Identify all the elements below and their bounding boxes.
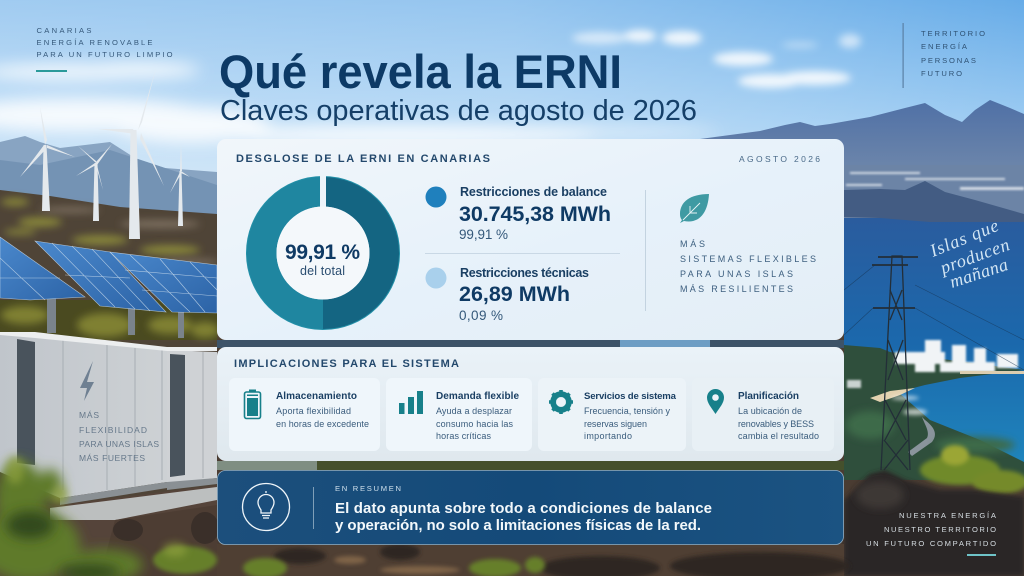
panel: summary	[218, 470, 844, 544]
bottom-right tagline: NUESTRA ENERGÍA	[899, 511, 997, 520]
card: system services: Frecuencia, tensión y	[584, 406, 670, 416]
background: foreground shrubs	[0, 456, 545, 576]
card: system services: importando	[584, 431, 632, 441]
stat: technical	[426, 266, 589, 323]
handwritten note	[926, 215, 1012, 292]
card: storage: Almacenamiento	[276, 391, 357, 402]
stat: technical: 0,09 %	[459, 308, 503, 323]
donut chart	[247, 172, 399, 329]
battery containers	[0, 332, 167, 498]
top-right tagline: PERSONAS	[921, 56, 976, 65]
top-right tagline: FUTURO	[921, 69, 962, 78]
top-right tagline: ENERGÍA	[921, 42, 968, 51]
battery label: FLEXIBILIDAD	[79, 425, 147, 435]
card: system services: reservas siguen	[584, 419, 647, 429]
card: system services: Servicios de sistema	[584, 391, 677, 402]
battery label: MÁS FUERTES	[79, 453, 145, 463]
stat: technical: 26,89 MWh	[459, 282, 570, 306]
stat: balance: 99,91 %	[459, 227, 508, 242]
card: planning	[692, 378, 834, 451]
top-left tagline: CANARIAS	[36, 26, 92, 35]
resilience message: PARA UNAS ISLAS	[680, 269, 793, 279]
panel heading: IMPLICACIONES PARA EL SISTEMA	[234, 358, 459, 370]
card: flexible demand: horas críticas	[436, 431, 492, 441]
handwritten note: mañana	[947, 254, 1010, 292]
card: planning: Planificación	[738, 391, 799, 402]
battery label: PARA UNAS ISLAS	[79, 439, 159, 449]
card: flexible demand	[386, 378, 532, 451]
panel: system implications	[217, 347, 844, 461]
background: ground behind panels	[217, 340, 850, 576]
date label: AGOSTO 2026	[739, 154, 820, 164]
top-right tagline	[902, 23, 985, 88]
panel: ERNI breakdown	[217, 139, 844, 340]
resilience message: MÁS	[680, 239, 705, 249]
card: planning: renovables y BESS	[738, 419, 814, 429]
panel heading: DESGLOSE DE LA ERNI EN CANARIAS	[236, 153, 490, 165]
card: planning: cambia el resultado	[738, 431, 819, 441]
card: storage: Aporta flexibilidad	[276, 406, 351, 416]
background: left wind and solar scene	[0, 68, 220, 576]
resilience message: MÁS RESILIENTES	[680, 284, 793, 294]
stat: balance	[426, 185, 611, 242]
stat: technical: Restricciones técnicas	[460, 266, 589, 280]
card: flexible demand: Demanda flexible	[436, 391, 519, 402]
top-left tagline: ENERGÍA RENOVABLE	[36, 38, 152, 47]
battery label: MÁS	[79, 410, 99, 420]
stat: balance: 30.745,38 MWh	[459, 202, 611, 226]
top-right tagline: TERRITORIO	[921, 29, 985, 38]
subtitle: Claves operativas de agosto de 2026	[220, 95, 697, 127]
background: right island scene	[700, 100, 1024, 576]
handwritten note: producen	[936, 234, 1012, 278]
wind turbines	[20, 68, 190, 239]
card: flexible demand: consumo hacia las	[436, 419, 514, 429]
icon: lightbulb	[242, 484, 290, 530]
card: storage	[229, 378, 380, 451]
battery label	[79, 410, 159, 463]
summary label: EN RESUMEN	[335, 484, 401, 493]
bottom-right tagline: NUESTRO TERRITORIO	[884, 525, 996, 534]
card: storage: en horas de excedente	[276, 419, 369, 429]
bottom-right tagline: UN FUTURO COMPARTIDO	[866, 539, 996, 548]
top-left tagline	[36, 26, 173, 72]
resilience message: SISTEMAS FLEXIBLES	[680, 254, 816, 264]
stat: balance: Restricciones de balance	[460, 185, 607, 199]
bottom-right tagline	[866, 511, 997, 556]
solar panels	[47, 295, 184, 338]
background: sky	[0, 0, 1024, 240]
handwritten note: Islas que	[926, 215, 1001, 261]
top-left tagline: PARA UN FUTURO LIMPIO	[36, 50, 173, 59]
battery lightning icon	[80, 361, 94, 401]
card: system services	[538, 378, 686, 451]
card: planning: La ubicación de	[738, 406, 802, 416]
summary text	[335, 500, 712, 534]
title: Qué revela la ERNI	[219, 45, 622, 98]
resilience message	[680, 239, 816, 294]
summary text: y operación, no solo a limitaciones físicas de la red.	[335, 517, 701, 534]
icon: leaf	[680, 194, 709, 223]
donut chart: 99,91 %	[285, 241, 360, 264]
summary text: El dato apunta sobre todo a condiciones de balance	[335, 500, 712, 517]
card: flexible demand: Ayuda a desplazar	[436, 406, 512, 416]
donut chart: del total	[300, 264, 345, 278]
ground	[0, 485, 217, 576]
